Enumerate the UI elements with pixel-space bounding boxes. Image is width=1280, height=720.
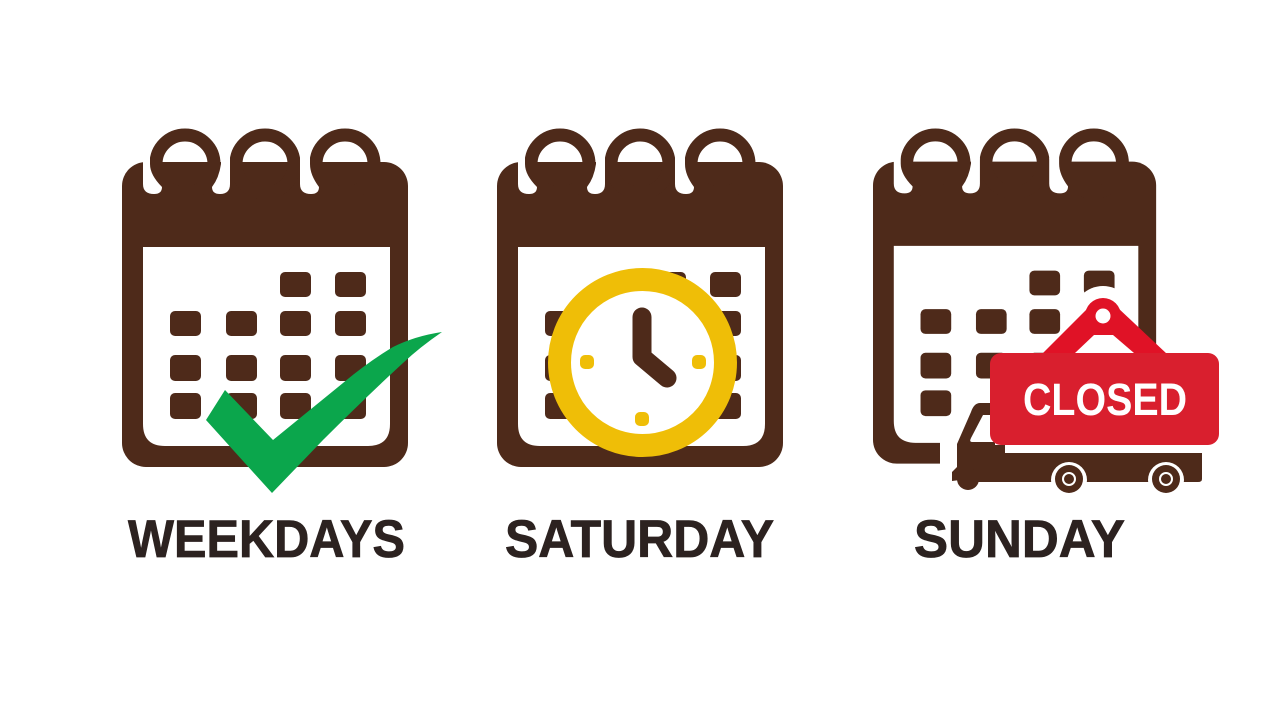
panel: saturday <box>497 135 783 569</box>
icon: yellow clock <box>560 280 726 446</box>
panel: sunday <box>873 135 1219 569</box>
icon: truck <box>940 386 1215 498</box>
label: weekdays: WEEKDAYS <box>128 510 405 569</box>
label: saturday: SATURDAY <box>505 510 774 569</box>
icon: closed sign: CLOSED <box>1023 374 1187 425</box>
icon: sunday calendar <box>873 135 1156 464</box>
icon: saturday calendar <box>497 135 783 467</box>
icon: weekdays calendar <box>122 135 408 467</box>
icon: green check mark <box>206 332 442 493</box>
label: sunday: SUNDAY <box>914 510 1125 569</box>
icon: closed sign <box>990 286 1219 445</box>
panel: weekdays <box>122 135 442 569</box>
